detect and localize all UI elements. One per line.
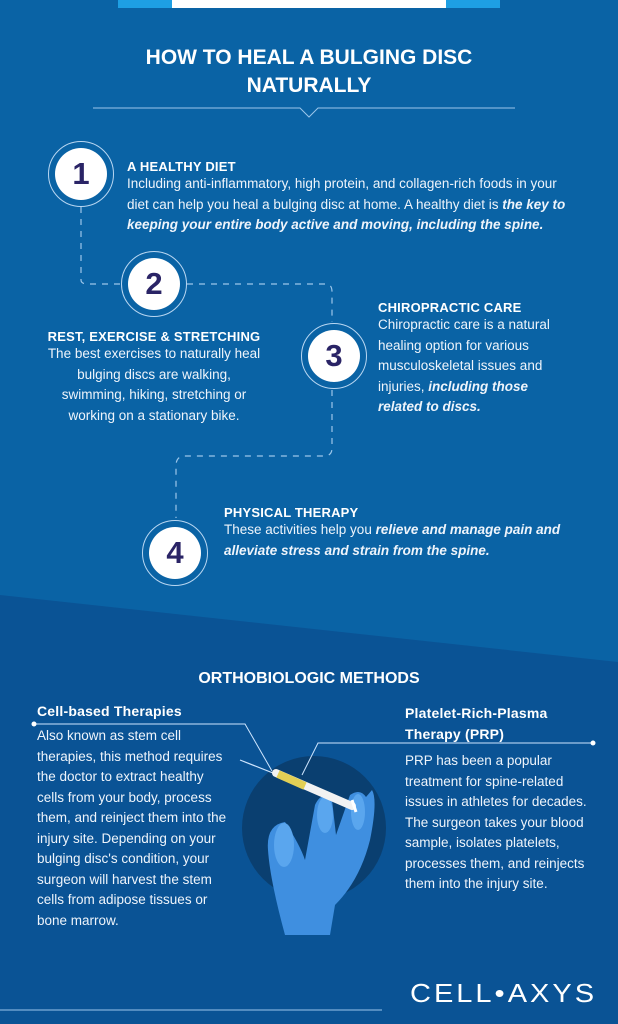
callout: PRP: processes them, and reinjects xyxy=(405,856,584,870)
step 4 number: 4 xyxy=(166,535,184,570)
logo: CELL•AXYS xyxy=(410,980,597,1008)
callout: cell-based: cells from your body, process xyxy=(37,790,212,804)
callout: cell-based: Also known as stem cell xyxy=(37,728,181,743)
step 3 text: Chiropractic care is a natural xyxy=(378,317,550,332)
step 1 text: Including anti-inflammatory, high protein, and collagen-rich foods in your xyxy=(127,176,557,191)
callout: PRP: The surgeon takes your blood xyxy=(405,814,584,830)
step 2 text: REST, EXERCISE & STRETCHING xyxy=(48,329,260,344)
step 2 text: swimming, hiking, stretching or xyxy=(62,387,246,402)
step 3 text: musculoskeletal issues and xyxy=(378,358,542,373)
callout: cell-based: surgeon will harvest the stem xyxy=(37,872,212,886)
step 2 text: bulging discs are walking, xyxy=(77,366,231,382)
callout: PRP: sample, isolates platelets, xyxy=(405,835,560,850)
title: NATURALLY xyxy=(247,74,371,97)
callout: cell-based: therapies, this method requires xyxy=(37,748,222,764)
callout: PRP: them into the injury site. xyxy=(405,876,548,891)
step 4 text: These activities help you relieve and manage pain and xyxy=(224,522,560,537)
step 4 number xyxy=(142,520,208,586)
step 3 text: CHIROPRACTIC CARE xyxy=(378,300,522,315)
step 3 number xyxy=(301,323,367,389)
step 1 text xyxy=(127,159,565,232)
callout: PRP: treatment for spine-related xyxy=(405,774,563,788)
callout: PRP: Platelet-Rich-Plasma xyxy=(405,705,548,721)
step 2 text: working on a stationary bike. xyxy=(68,408,240,422)
callout: PRP: issues in athletes for decades. xyxy=(405,794,587,809)
step 3 text: related to discs. xyxy=(378,399,481,414)
step 2 number: 2 xyxy=(145,266,163,301)
callout: cell-based: them, and reinject them into the xyxy=(37,810,226,825)
step 1 number xyxy=(48,141,114,207)
callout: cell-based xyxy=(37,703,226,928)
step 3 text: healing option for various xyxy=(378,338,529,352)
callout: cell-based: cells from adipose tissues or xyxy=(37,892,207,907)
callout: PRP: PRP has been a popular xyxy=(405,753,552,768)
section heading: ORTHOBIOLOGIC METHODS xyxy=(198,670,420,687)
step 2 text: The best exercises to naturally heal xyxy=(48,346,260,361)
callout: cell-based: Cell-based Therapies xyxy=(37,703,182,719)
step 3 text xyxy=(378,300,550,414)
step 1 text: A HEALTHY DIET xyxy=(127,159,236,174)
step 2 number xyxy=(121,251,187,317)
title: HOW TO HEAL A BULGING DISC xyxy=(146,46,472,69)
step 3 text: injuries, including those xyxy=(378,378,528,394)
title xyxy=(146,46,472,97)
step 2 text xyxy=(48,329,260,423)
step 4 text: alleviate stress and strain from the spine. xyxy=(224,542,490,558)
step 3 number: 3 xyxy=(325,338,343,373)
callout: cell-based: bulging disc's condition, your xyxy=(37,851,209,866)
step 1 number: 1 xyxy=(72,156,90,191)
callout: PRP: Therapy (PRP) xyxy=(405,726,504,742)
step 4 text: PHYSICAL THERAPY xyxy=(224,505,358,520)
callout: PRP xyxy=(405,705,587,891)
step 4 text xyxy=(224,505,560,558)
callout: cell-based: bone marrow. xyxy=(37,912,119,928)
step 1 text: keeping your entire body active and moving, including the spine. xyxy=(127,217,543,232)
step 1 text: diet can help you heal a bulging disc at home. A healthy diet is the key to xyxy=(127,196,565,212)
callout: cell-based: injury site. Depending on your xyxy=(37,830,216,846)
callout: cell-based: the doctor to extract healthy xyxy=(37,769,204,784)
